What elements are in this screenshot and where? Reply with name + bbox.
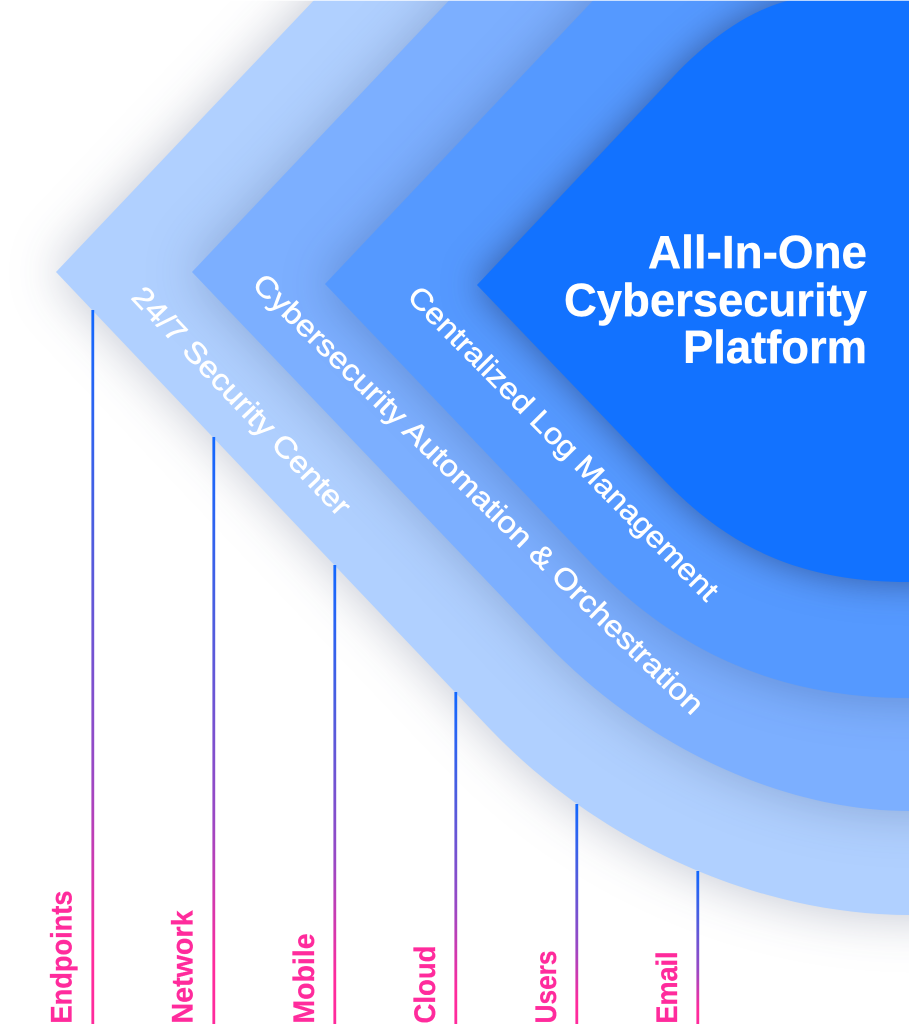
label: Cloud: Cloud (409, 946, 442, 1024)
line: network (212, 437, 215, 1024)
panel: cybersecurity automation layer (192, 0, 909, 811)
connector lines (91, 310, 699, 1024)
title: All-In-One (648, 226, 867, 278)
label: Network: Network (166, 910, 200, 1024)
layer label: Centralized Log Management: Centralized Log Management (401, 280, 725, 608)
top edge highlight (0, 0, 909, 1)
line: mobile (333, 565, 336, 1024)
label: Mobile: Mobile (288, 934, 321, 1024)
line: email (696, 871, 699, 1024)
title: Platform (683, 321, 867, 373)
title (564, 226, 867, 373)
label: Users: Users (530, 950, 563, 1024)
label: Endpoints: Endpoints (46, 890, 78, 1024)
panel: all-in-one core (477, 0, 909, 582)
layer label: Cybersecurity Automation & Orchestration: Cybersecurity Automation & Orchestration (246, 267, 710, 721)
title: Cybersecurity (564, 274, 867, 326)
line: endpoints (91, 310, 94, 1024)
line: cloud (454, 692, 457, 1024)
line: users (575, 804, 578, 1024)
panel: centralized log management layer (325, 0, 909, 698)
label: Email: Email (651, 952, 684, 1024)
layer label: 24/7 Security Center: 24/7 Security Center (125, 280, 358, 523)
